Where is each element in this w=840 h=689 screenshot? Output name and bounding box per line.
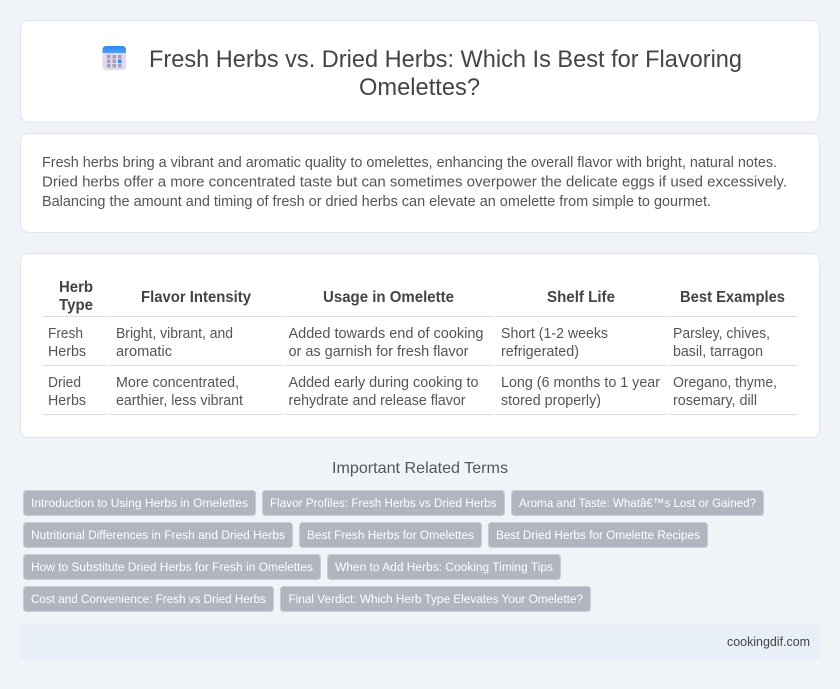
- table header: Flavor Intensity: [141, 289, 251, 306]
- table row: fresh herbs: Fresh: [48, 326, 83, 342]
- table row: dried herbs: Dried: [48, 375, 81, 391]
- table row: dried herbs: rosemary, dill: [673, 393, 757, 409]
- table row: dried herbs: stored properly): [501, 393, 601, 409]
- heading: related terms: Important Related Terms: [332, 460, 508, 477]
- table row: fresh herbs: or as garnish for fresh flavor: [288, 344, 469, 360]
- table row: fresh herbs: aromatic: [116, 344, 172, 360]
- title: [149, 46, 742, 101]
- tag: Flavor Profiles: Fresh Herbs vs Dried Herbs: [270, 496, 496, 510]
- table header: Shelf Life: [547, 289, 615, 306]
- tag: [262, 490, 504, 516]
- table row: fresh herbs: Short (1-2 weeks: [501, 326, 608, 342]
- table row: fresh herbs: Added towards end of cooking: [288, 326, 484, 342]
- table row: dried herbs: [48, 375, 777, 409]
- table row: fresh herbs: Parsley, chives,: [673, 326, 770, 342]
- related term tags: [24, 490, 764, 612]
- tag: [512, 490, 764, 516]
- tag: Nutritional Differences in Fresh and Dried Herbs: [31, 528, 285, 542]
- table row: dried herbs: Added early during cooking to: [288, 375, 478, 391]
- table row: dried herbs: Herbs: [48, 393, 86, 409]
- tag: [300, 522, 482, 548]
- table row: fresh herbs: Bright, vibrant, and: [116, 326, 233, 342]
- table header: Herb: [59, 279, 93, 296]
- table header: Best Examples: [680, 289, 785, 306]
- tag: [24, 490, 256, 516]
- tag: Final Verdict: Which Herb Type Elevates Your Omelette?: [288, 592, 583, 606]
- table header: [59, 279, 785, 314]
- title: Omelettes?: [359, 74, 480, 101]
- tag: [24, 586, 274, 612]
- footer: [20, 625, 820, 659]
- tag: [24, 554, 320, 580]
- panel: comparison table: [20, 254, 820, 438]
- table row: dried herbs: Long (6 months to 1 year: [501, 375, 660, 391]
- tag: Best Dried Herbs for Omelette Recipes: [496, 528, 700, 542]
- table row: fresh herbs: [48, 326, 770, 360]
- panel: title card: [20, 20, 820, 122]
- tag: [24, 522, 292, 548]
- text block: introduction: Dried herbs offer a more concentrated taste but can sometimes overpower the delicate eggs if used excessively.: [42, 174, 787, 190]
- table row: fresh herbs: refrigerated): [501, 344, 579, 360]
- tag: Aroma and Taste: Whatâ€™s Lost or Gained?: [519, 496, 756, 510]
- tag: Best Fresh Herbs for Omelettes: [307, 528, 474, 542]
- footer: cookingdif.com: [727, 635, 810, 649]
- table header: Usage in Omelette: [323, 289, 454, 306]
- table row: fresh herbs: basil, tarragon: [673, 344, 763, 360]
- tag: When to Add Herbs: Cooking Timing Tips: [335, 560, 553, 574]
- table row: dried herbs: rehydrate and release flavor: [288, 393, 466, 409]
- tag: [328, 554, 560, 580]
- tag: How to Substitute Dried Herbs for Fresh in Omelettes: [31, 560, 313, 574]
- tag: Introduction to Using Herbs in Omelettes: [31, 496, 248, 510]
- table header: Type: [59, 297, 93, 314]
- table row: dried herbs: earthier, less vibrant: [116, 393, 243, 409]
- text block: introduction: Fresh herbs bring a vibrant and aromatic quality to omelettes, enhancing the overall flavor with bright, natural notes.: [42, 155, 777, 171]
- tag: Cost and Convenience: Fresh vs Dried Herbs: [31, 592, 266, 606]
- table row: dried herbs: More concentrated,: [116, 375, 239, 391]
- text block: introduction: [42, 155, 787, 210]
- table row: dried herbs: Oregano, thyme,: [673, 375, 777, 391]
- table row: fresh herbs: Herbs: [48, 344, 86, 360]
- tag: [280, 586, 590, 612]
- title: Fresh Herbs vs. Dried Herbs: Which Is Best for Flavoring: [149, 46, 742, 73]
- tag: [488, 522, 708, 548]
- panel: introduction: [20, 134, 820, 232]
- text block: introduction: Balancing the amount and timing of fresh or dried herbs can elevate an omelette from simple to gourmet.: [42, 194, 711, 210]
- icon: calendar: [102, 46, 126, 70]
